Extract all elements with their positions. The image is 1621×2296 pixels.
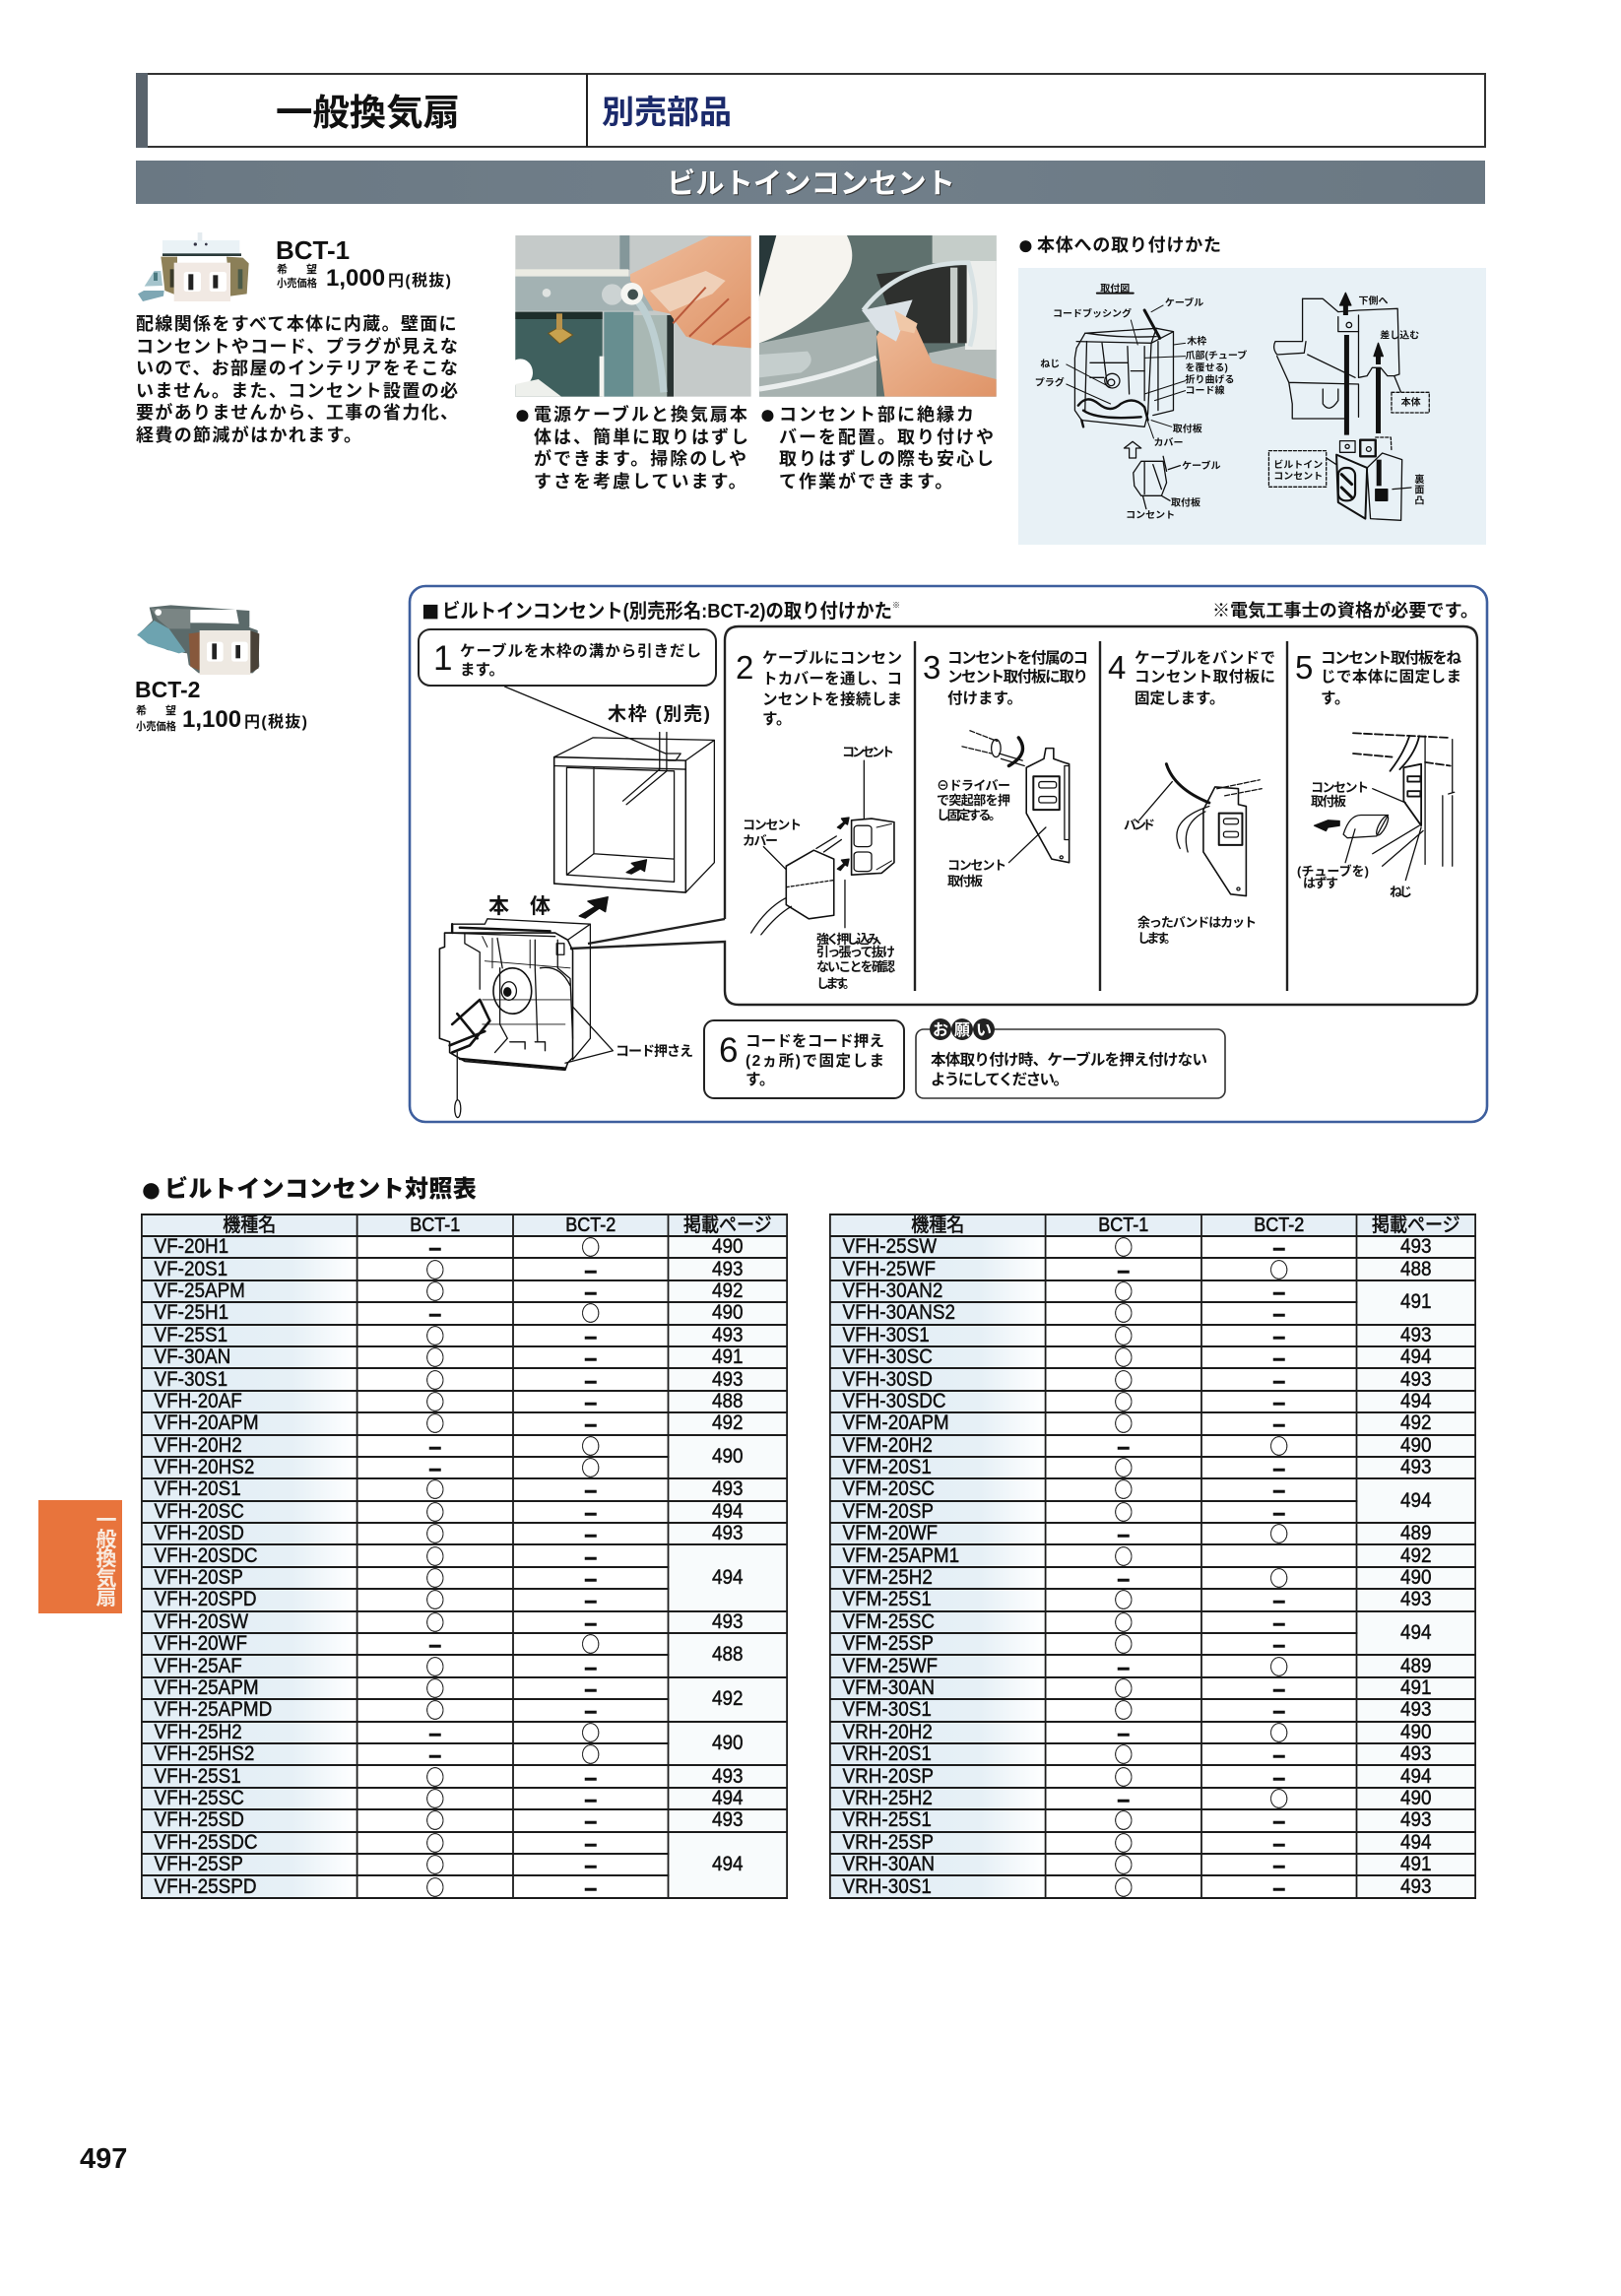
photo caption 2: コンセント部に絶縁カ [779, 405, 976, 425]
table: left compatibility chart: 488 [712, 1643, 744, 1666]
photo caption 1 [514, 399, 750, 492]
diagram: unit exploded view: コード線 [1186, 383, 1225, 396]
description text: コンセントやコード、プラグが見えな [136, 336, 459, 357]
illustration: band fastening: バンド [1124, 818, 1155, 832]
panel: installation steps [410, 586, 1487, 1122]
table heading [140, 1169, 477, 1211]
badge: お願い: お [933, 1021, 948, 1039]
badge: お願い [930, 1018, 995, 1040]
table header row [831, 1214, 1474, 1236]
title band: ビルトインコンセント [668, 168, 956, 201]
table: left compatibility chart: 490 [712, 1445, 744, 1468]
table: left compatibility chart: 492 [712, 1687, 744, 1710]
table header row: 機種名 [223, 1214, 276, 1236]
illustration: outlet cover connection: コンセント [743, 818, 802, 832]
step 4: 固定します。 [1135, 689, 1224, 707]
photo: removing cable [508, 235, 751, 397]
diagram: outlet insertion view: 裏 [1414, 473, 1425, 486]
illustration: band fastening [1124, 764, 1262, 946]
unit [439, 933, 573, 1070]
step 5: コンセント取付板をね [1321, 649, 1461, 667]
diagram: unit exploded view: 取付図 [1100, 282, 1130, 295]
table: left compatibility chart [141, 1214, 788, 1899]
table header row: BCT-2 [1254, 1214, 1304, 1236]
header bar [136, 73, 1485, 148]
callout: request: ようにしてください。 [931, 1071, 1069, 1088]
price: BCT-2: 希 [136, 703, 147, 717]
title band: ビルトインコンセント [667, 167, 955, 200]
description text: いません。また、コンセント設置の必 [136, 381, 459, 401]
photo caption 1: 電源ケーブルと換気扇本 [534, 404, 749, 425]
step 2: ンセントを接続しま [762, 690, 902, 708]
illustration: wooden frame and main unit: 木枠 (別売) [608, 703, 710, 725]
table: right compatibility chart: 494 [1400, 1621, 1432, 1644]
illustration: band fastening: 余ったバンドはカット [1137, 915, 1257, 930]
description text: いので、お部屋のインテリアをそこな [136, 359, 459, 378]
step 1 [419, 629, 716, 686]
diagram: unit exploded view: プラグ [1035, 376, 1065, 389]
diagram: outlet insertion view: コンセント [1273, 471, 1323, 483]
photo caption 2: バーを配置。取り付けや [779, 427, 996, 447]
page number: 497 [80, 2143, 127, 2175]
illustration: outlet cover connection: カバー [743, 833, 778, 848]
diagram: outlet insertion view: 差し込む [1380, 328, 1419, 341]
step 2: す。 [762, 710, 791, 728]
diagram: unit exploded view: 爪部(チューブ [1186, 349, 1247, 361]
photo caption 2: 取りはずしの際も安心し [779, 449, 996, 469]
diagram: unit exploded view: コードブッシング [1053, 307, 1132, 320]
badge: お願い: い [976, 1022, 992, 1039]
photo caption 2 [759, 399, 996, 492]
product name: BCT-2 [135, 677, 307, 733]
step 1: ます。 [460, 661, 504, 679]
illustration: wooden frame and main unit [439, 687, 714, 1118]
panel: steps 2 to 5 frame [570, 626, 1477, 1005]
illustration: fixing plate with screw: ねじ [1390, 885, 1412, 899]
panel title: ※ [892, 601, 900, 610]
photo caption 1: すさを考慮しています。 [534, 472, 748, 492]
panel title: ■ [421, 595, 439, 627]
table header row: BCT-1 [1098, 1214, 1148, 1236]
illustration: outlet on mounting plate [937, 731, 1070, 888]
step 5: 5 [1295, 649, 1313, 686]
table heading: ビルトインコンセント対照表 [164, 1176, 477, 1203]
heading: section: 別売部品 [602, 94, 732, 130]
photo caption 1: ができます。掃除のしや [534, 448, 748, 469]
diagram: unit exploded view: カバー [1153, 437, 1183, 449]
description text: 経費の節減がはかれます。 [136, 425, 362, 445]
table heading: ● [140, 1169, 162, 1211]
table header row: BCT-1 [410, 1214, 460, 1236]
diagram: unit exploded view: 木枠 [1187, 334, 1206, 347]
illustration: outlet cover connection: コンセント [842, 745, 894, 759]
illustration: outlet on mounting plate: で突起部を押 [937, 793, 1010, 808]
step 2: トカバーを通し、コ [762, 670, 902, 688]
price: BCT-1: 小売価格 [277, 276, 317, 290]
heading: mounting to main unit: ● [1017, 230, 1034, 260]
illustration: outlet cover connection: 強く押し込み、 [816, 932, 889, 947]
table header row: 機種名 [911, 1214, 964, 1236]
photo caption 1: 体は、簡単に取りはずし [534, 426, 750, 447]
diagram: outlet insertion view: 下側へ [1358, 294, 1389, 306]
panel title: ビルトインコンセント(別売形名:BCT-2)の取り付けかた [442, 600, 892, 623]
step 5 [1295, 649, 1461, 899]
illustration: wooden frame and main unit: コード押さえ [616, 1043, 693, 1059]
step 3 [923, 649, 1088, 888]
diagram: outlet insertion view: 面 [1414, 485, 1425, 496]
title band [136, 161, 1485, 204]
photo caption 2: ● [759, 399, 778, 429]
description text: 要がありませんから、工事の省力化、 [136, 402, 459, 423]
price: BCT-2: 円(税抜) [244, 713, 307, 731]
illustration: outlet cover connection: 引っ張って抜け [816, 945, 895, 959]
step 6: コードをコード押え [746, 1032, 884, 1050]
table: left compatibility chart: 490 [712, 1732, 744, 1754]
illustration: outlet on mounting plate: ⊖ドライバー [937, 778, 1010, 793]
heading: category: 一般換気扇 [276, 93, 460, 133]
step 6 [704, 1020, 904, 1098]
illustration: fixing plate with screw: コンセント [1311, 780, 1369, 795]
table: right compatibility chart: 491 [1400, 1290, 1432, 1313]
illustration: outlet on mounting plate: コンセント [947, 858, 1006, 873]
price: BCT-1: 円(税抜) [388, 272, 451, 290]
side tab [38, 1500, 122, 1613]
diagram: unit exploded view: 折り曲げる [1186, 372, 1235, 385]
step 5: じで本体に固定しま [1321, 668, 1461, 686]
step 4: ケーブルをバンドで [1135, 648, 1275, 667]
panel: mounting diagram [1018, 268, 1486, 545]
description text [136, 314, 459, 445]
photo caption 1: ● [514, 399, 533, 429]
diagram: unit exploded view [1035, 282, 1247, 521]
illustration: fixing plate with screw: 取付板 [1311, 794, 1346, 809]
table header row: 掲載ページ [1372, 1214, 1460, 1236]
step 4: 4 [1108, 649, 1126, 686]
step 1: 1 [433, 639, 452, 678]
diagram: unit exploded view: ケーブル [1165, 296, 1203, 309]
diagram: unit exploded view: ねじ [1040, 359, 1060, 370]
price: BCT-2 [136, 703, 307, 733]
product name: BCT-1: BCT-1 [276, 235, 350, 265]
heading: mounting to main unit [1017, 230, 1222, 260]
note: qualification required: ※電気工事士の資格が必要です。 [1212, 600, 1478, 621]
step 2: ケーブルにコンセン [762, 648, 902, 667]
price: BCT-2: 小売価格 [136, 719, 176, 733]
price: BCT-1: 1,000 [326, 265, 385, 292]
illustration: wooden frame and main unit: 本 体 [488, 895, 551, 918]
diagram: outlet insertion view: 凸 [1414, 494, 1425, 506]
illustration: fixing plate with screw: はずす [1303, 876, 1338, 890]
illustration: outlet on mounting plate: 取付板 [947, 874, 983, 888]
description text: 配線関係をすべて本体に内蔵。壁面に [136, 314, 458, 334]
step 2 [736, 648, 902, 991]
diagram: unit exploded view: ケーブル [1182, 459, 1221, 472]
price: BCT-1: 希 [277, 262, 288, 276]
illustration: outlet on mounting plate: し固定する。 [937, 808, 1002, 822]
step 4 [1108, 648, 1275, 946]
table header row: 掲載ページ [683, 1214, 772, 1236]
step 3: 付けます。 [947, 689, 1022, 707]
table: left compatibility chart: 494 [712, 1853, 744, 1875]
table: right compatibility chart: 494 [1400, 1489, 1432, 1512]
illustration: outlet cover connection [743, 745, 895, 991]
illustration: outlet cover connection: ないことを確認 [816, 959, 895, 974]
table header row [143, 1214, 786, 1236]
step 3: 3 [923, 649, 940, 686]
diagram: unit exploded view: 取付板 [1171, 495, 1200, 508]
photo caption 2: て作業ができます。 [779, 471, 954, 492]
step 2: 2 [736, 649, 753, 686]
callout: request [916, 1018, 1225, 1098]
step 1: ケーブルを木枠の溝から引きだし [460, 641, 701, 660]
step 6: (2ヵ所)で固定しま [746, 1052, 884, 1070]
heading: mounting to main unit: 本体への取り付けかた [1037, 235, 1222, 255]
illustration: fixing plate with screw [1297, 733, 1455, 899]
side tab: 一般換気扇 [94, 1509, 116, 1606]
illustration: fixing plate with screw: (チューブを) [1297, 864, 1369, 879]
diagram: outlet insertion view [1268, 293, 1429, 520]
product name: BCT-1 [276, 235, 451, 292]
step 3: コンセントを付属のコ [947, 649, 1088, 667]
product name: BCT-2: BCT-2 [135, 677, 200, 702]
table header row: BCT-2 [565, 1214, 616, 1236]
diagram: unit exploded view: コンセント [1126, 509, 1175, 521]
badge: お願い: 願 [954, 1022, 970, 1039]
step 6: す。 [746, 1071, 774, 1088]
callout: request: 本体取り付け時、ケーブルを押え付けない [931, 1050, 1207, 1069]
price: BCT-2: 望 [165, 703, 176, 717]
diagram: outlet insertion view: ビルトイン [1273, 458, 1323, 471]
table: left compatibility chart: 494 [712, 1566, 744, 1589]
price: BCT-2: 1,100 [182, 706, 241, 733]
photo: outlet cover [759, 235, 997, 397]
step 3: ンセント取付板に取り [947, 668, 1088, 686]
product: BCT-2 photo [137, 605, 259, 675]
table: right compatibility chart [829, 1214, 1476, 1899]
diagram: outlet insertion view: 本体 [1401, 396, 1421, 409]
diagram: unit exploded view: 取付板 [1173, 422, 1202, 434]
diagram: unit exploded view: を覆せる) [1186, 362, 1228, 374]
price: BCT-1 [277, 262, 451, 292]
panel title [421, 595, 900, 627]
step 5: す。 [1321, 689, 1349, 707]
step 4: コンセント取付板に [1135, 668, 1275, 686]
product: BCT-1 photo [138, 232, 249, 301]
illustration: band fastening: します。 [1137, 931, 1177, 946]
illustration: outlet cover connection: します。 [816, 976, 856, 991]
step 6: 6 [719, 1031, 738, 1070]
price: BCT-1: 望 [306, 262, 317, 276]
